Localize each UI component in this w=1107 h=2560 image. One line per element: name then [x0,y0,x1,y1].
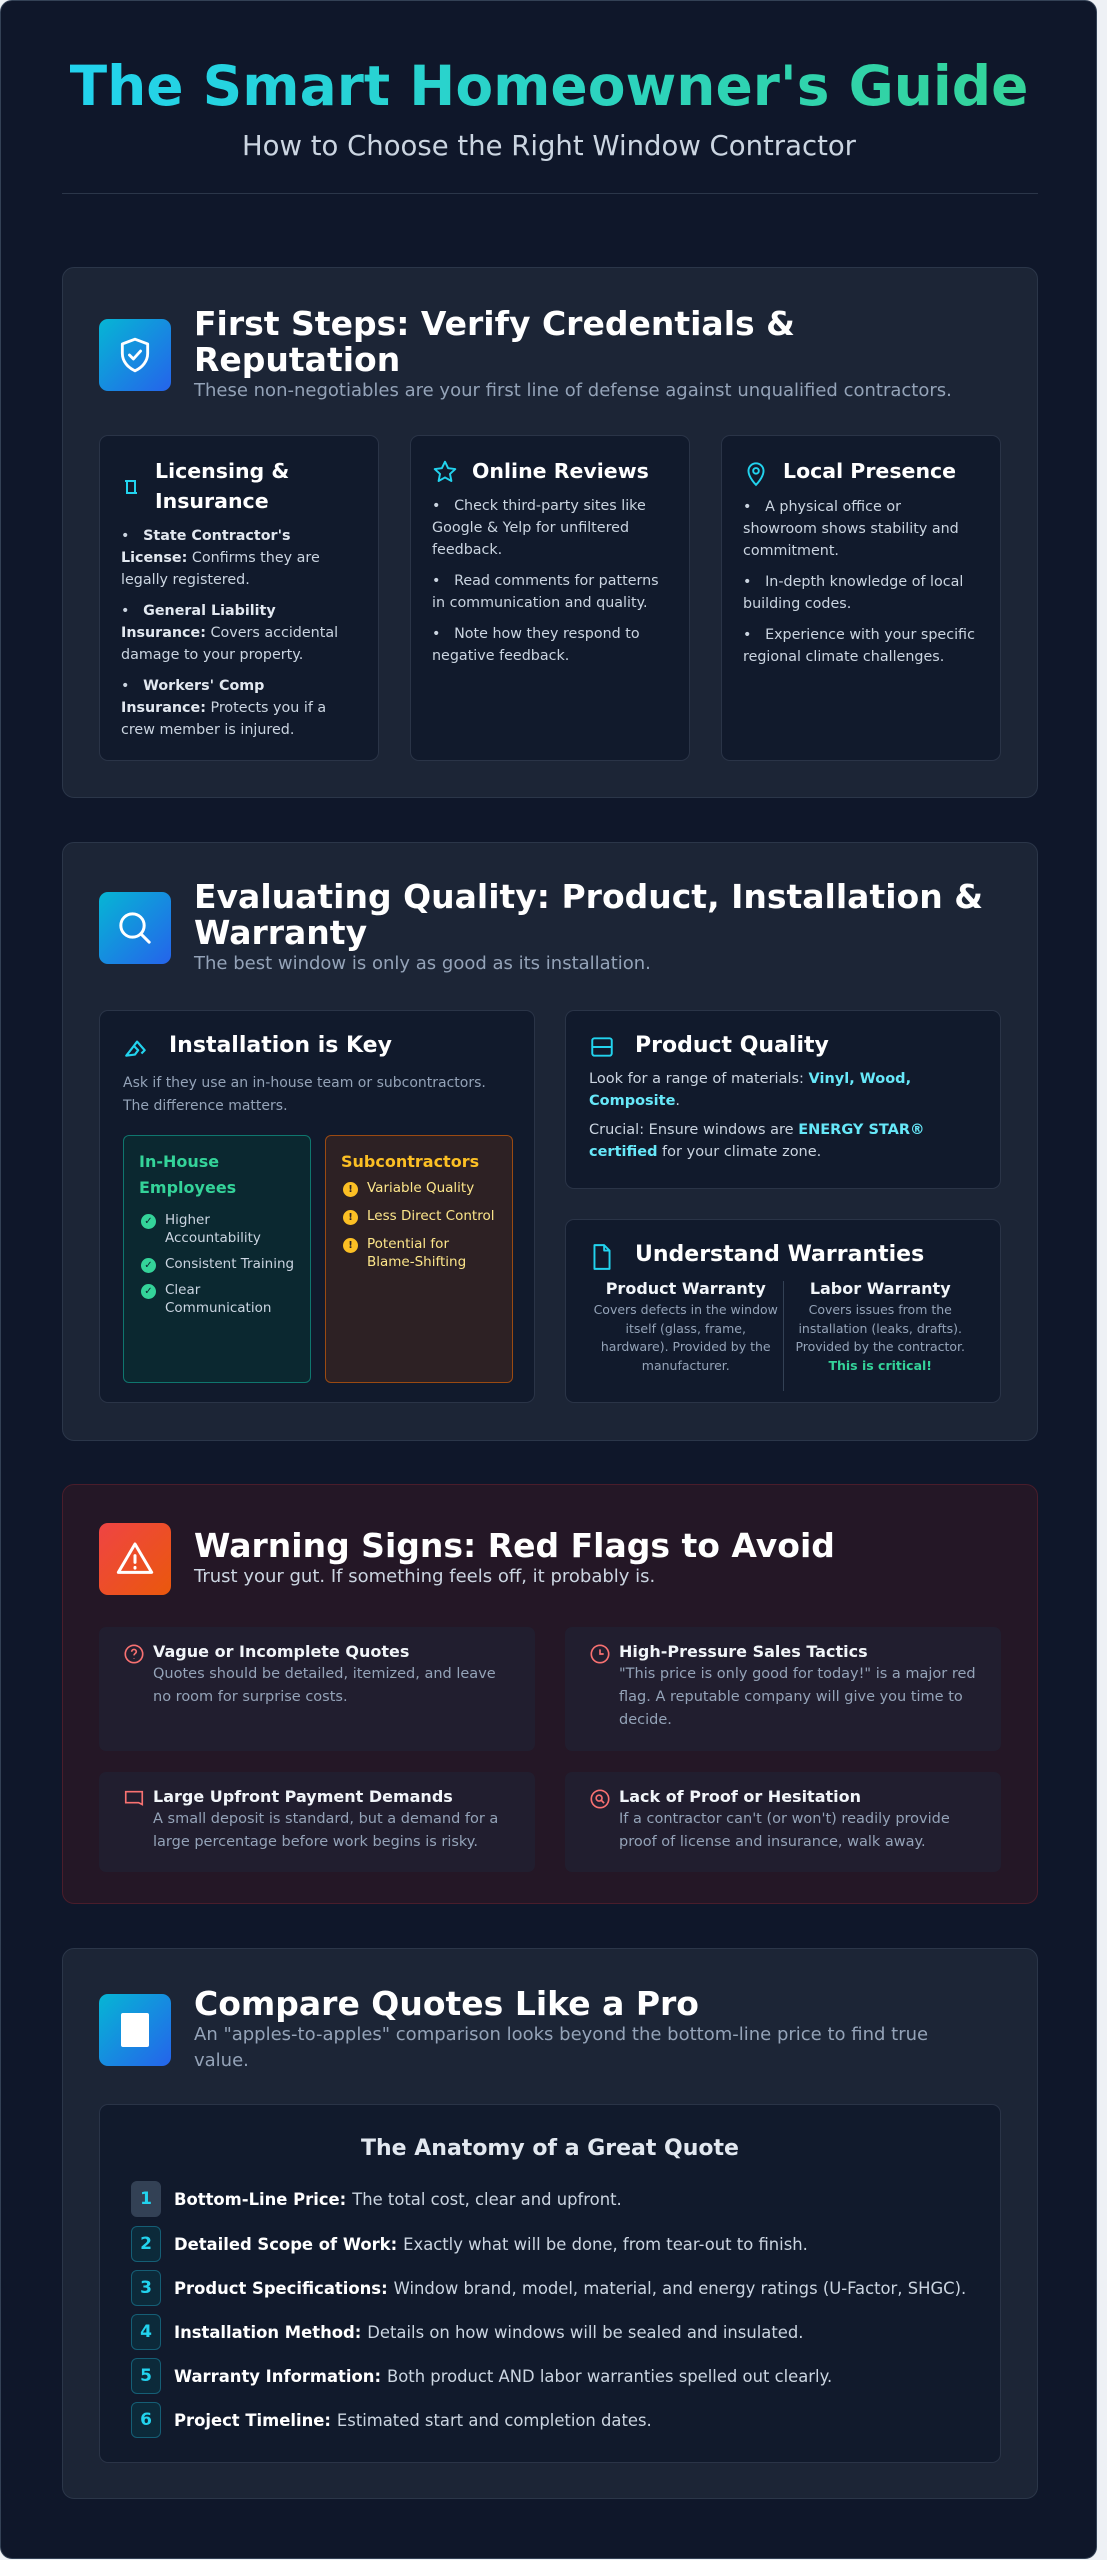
list: quote items: Detailed Scope of Work: [174,2234,397,2254]
card: licensing: crew member is injured. [121,722,294,738]
box: subcontractors: ! [348,1212,353,1223]
section header: first steps: These non-negotiables are your first line of defense against unqualified contractors. [194,380,952,401]
section header: warning signs: Warning Signs: Red Flags to Avoid [194,1526,835,1565]
card: warranties [565,1219,1001,1403]
icon: document [99,1994,171,2066]
card: product quality: Look for a range of materials: Vinyl, Wood, Composite. [589,1071,911,1109]
card: online reviews: Google & Yelp for unfiltered [432,520,629,536]
card: licensing: Insurance: Protects you if a [121,700,326,716]
card: vague quotes: Vague or Incomplete Quotes [153,1642,409,1661]
list: quote items: Details on how windows will be sealed and insulated. [367,2322,803,2342]
card: warranties: Product Warranty [606,1279,766,1298]
section header: first steps [99,304,952,401]
panel: warning signs [62,1484,1038,1904]
card: lack of proof [565,1772,1001,1872]
card: local presence: • A physical office or [743,499,901,515]
card: online reviews: • Read comments for patterns [432,573,659,589]
card: vague quotes [99,1627,535,1751]
section header: warning signs [99,1523,835,1595]
card: local presence: regional climate challenges. [743,649,944,665]
section header: evaluating quality: Evaluating Quality: Product, Installation & Warranty [194,877,983,952]
list: quote items: Installation Method: [174,2322,361,2342]
box: in-house: Consistent Training [165,1256,294,1272]
card: online reviews [410,435,690,761]
list: quote items: Exactly what will be done, from tear-out to finish. [403,2234,808,2254]
box: in-house: Higher Accountability [165,1212,261,1246]
heading: anatomy: The Anatomy of a Great Quote [361,2136,739,2161]
box: subcontractors: Potential for Blame-Shifting [367,1236,466,1270]
box: in-house [123,1135,311,1383]
card: local presence: commitment. [743,543,839,559]
card: high pressure: High-Pressure Sales Tactics [619,1642,868,1661]
card: licensing: License: Confirms they are [121,550,320,566]
card: installation is key: Installation is Key [169,1033,392,1058]
card: online reviews: • Check third-party sites like [432,498,646,514]
card: product quality: Product Quality [635,1033,829,1058]
card: anatomy of a great quote [99,2104,1001,2463]
card: upfront payment: Large Upfront Payment Demands [153,1787,453,1806]
icon: magnifier [99,892,171,964]
box: subcontractors: ! [348,1184,353,1195]
card: high pressure [565,1627,1001,1751]
box: in-house: ✓ [144,1260,153,1271]
card: online reviews: negative feedback. [432,648,569,664]
section header: first steps: First Steps: Verify Credentials & Reputation [194,304,795,379]
list: quote items: 4 [140,2322,152,2342]
card: local presence: building codes. [743,596,851,612]
panel: compare quotes [62,1948,1038,2499]
card: upfront payment: A small deposit is standard, but a demand for a large percentage before work begins is risky. [153,1811,498,1850]
section header: evaluating quality: The best window is only as good as its installation. [194,953,651,974]
icon: shield [99,319,171,391]
card: online reviews: Online Reviews [472,459,649,483]
list: quote items: 1 [140,2189,152,2209]
box: in-house: Clear Communication [165,1282,271,1316]
list: quote items: Bottom-Line Price: [174,2190,346,2208]
card: lack of proof: Lack of Proof or Hesitation [619,1787,861,1806]
card: online reviews: in communication and quality. [432,595,648,611]
list: quote items: Window brand, model, material, and energy ratings (U-Factor, SHGC). [394,2278,966,2298]
card: local presence [721,435,1001,761]
panel: evaluating quality [62,842,1038,1441]
list: quote items: Estimated start and completion dates. [337,2410,652,2430]
card: lack of proof: If a contractor can't (or won't) readily provide proof of license and insurance, walk away. [619,1811,950,1850]
card: online reviews: feedback. [432,542,502,558]
card: local presence: showroom shows stability and [743,521,959,537]
card: vague quotes: Quotes should be detailed, itemized, and leave no room for surprise costs. [153,1666,496,1705]
card: licensing: • State Contractor's [121,528,290,544]
list: quote items: Product Specifications: [174,2278,388,2298]
card: upfront payment [99,1772,535,1872]
list: quote items: Project Timeline: [174,2410,331,2430]
panel: first steps [62,267,1038,798]
card: product quality: Crucial: Ensure windows are ENERGY STAR® certified for your climate zone. [589,1122,925,1160]
box: subcontractors: Less Direct Control [367,1208,494,1224]
card: licensing: damage to your property. [121,647,303,663]
title: The Smart Homeowner's Guide [70,54,1028,118]
box: in-house: In-House Employees [139,1152,236,1197]
card: warranties: Labor Warranty [810,1279,951,1298]
list: quote items: Warranty Information: [174,2366,381,2386]
list: quote items [131,2181,966,2438]
card: licensing: • Workers' Comp [121,678,264,694]
section header: evaluating quality [99,877,983,974]
box: in-house: ✓ [144,1216,153,1227]
card: licensing: legally registered. [121,572,250,588]
icon: warning [99,1523,171,1595]
card: product quality [565,1010,1001,1189]
box: subcontractors: Subcontractors [341,1152,479,1171]
card: warranties: Covers issues from the installation (leaks, drafts). Provided by the contractor. This is critical! [795,1302,965,1372]
card: installation is key [99,1010,535,1403]
card: licensing: Licensing & Insurance [155,459,289,513]
box: subcontractors: ! [348,1240,353,1251]
card: warranties: Covers defects in the window itself (glass, frame, hardware). Provided by the manufacturer. [594,1302,778,1372]
list: quote items: 2 [140,2234,152,2254]
card: online reviews: • Note how they respond to [432,626,640,642]
list: quote items: 6 [140,2410,152,2430]
section header: warning signs: Trust your gut. If something feels off, it probably is. [194,1566,655,1587]
section header: compare quotes [99,1984,928,2071]
card: licensing: Insurance: Covers accidental [121,625,338,641]
list: quote items: The total cost, clear and upfront. [352,2190,622,2208]
subtitle: How to Choose the Right Window Contractor [242,130,856,162]
section header: compare quotes: Compare Quotes Like a Pro [194,1984,699,2023]
box: in-house: ✓ [144,1286,153,1297]
list: quote items: 5 [140,2366,152,2386]
list: quote items: Both product AND labor warranties spelled out clearly. [387,2366,832,2386]
section header: compare quotes: An "apples-to-apples" comparison looks beyond the bottom-line price to find true value. [194,2024,928,2071]
card: warranties: Understand Warranties [635,1242,924,1267]
list: quote items: 3 [140,2278,152,2298]
card: licensing: • General Liability [121,603,276,619]
card: local presence: Local Presence [783,459,956,483]
card: local presence: • In-depth knowledge of local [743,574,963,590]
box: subcontractors: Variable Quality [367,1180,474,1196]
card: licensing [99,435,379,761]
card: high pressure: "This price is only good for today!" is a major red flag. A reputable company will give you time to decide. [619,1666,976,1728]
card: local presence: • Experience with your specific [743,627,975,643]
card: installation is key: Ask if they use an in-house team or subcontractors. The difference matters. [123,1075,486,1114]
box: subcontractors [325,1135,513,1383]
